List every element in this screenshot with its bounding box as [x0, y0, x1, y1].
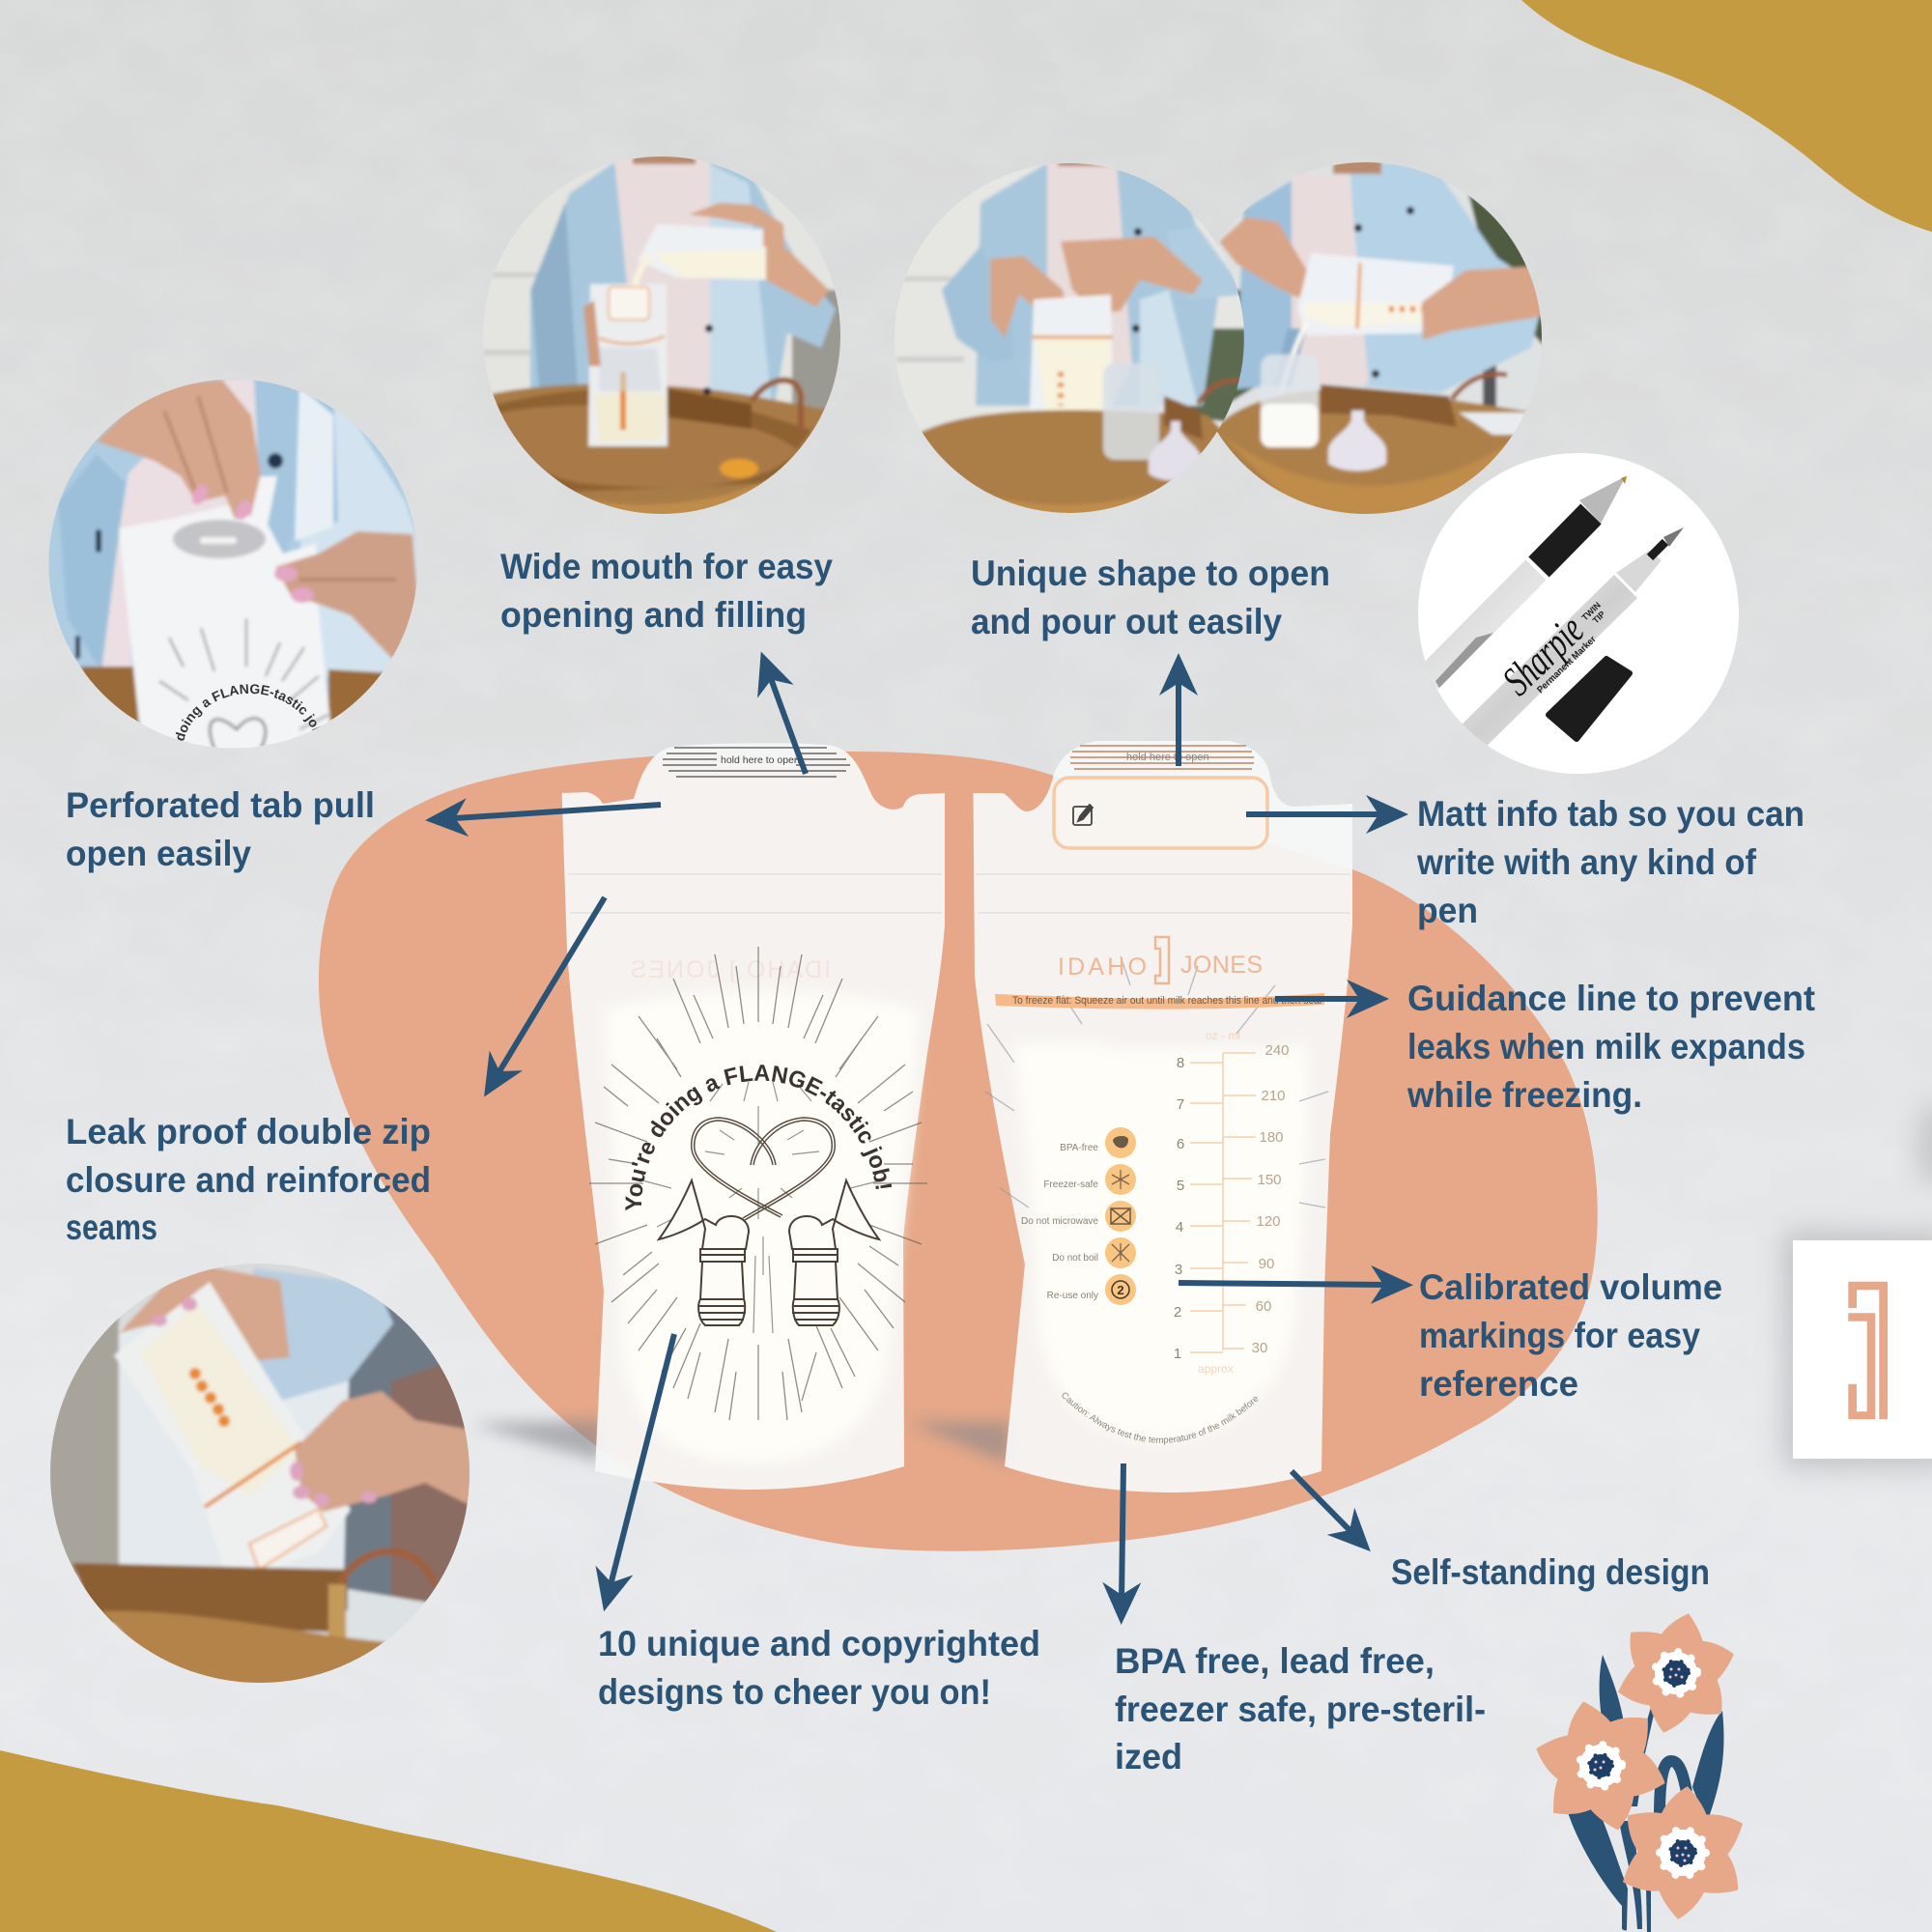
- panel: right bag (front, volume markings): [974, 741, 1352, 1492]
- millilitre numbers: 60: [1256, 1298, 1271, 1315]
- text: matt info tab: pen: [1417, 891, 1478, 930]
- safety icon labels: Freezer-safe: [1043, 1179, 1098, 1190]
- arrow: unique designs: [610, 1334, 674, 1589]
- arrow: matt info tab: [1246, 811, 1385, 817]
- ghost logo: IDAHO ] JONES: [629, 956, 831, 983]
- text: unique shape: [971, 554, 1330, 641]
- tab label: hold here to open: [1126, 752, 1209, 763]
- arrow: calibrated markings: [1179, 1283, 1390, 1285]
- text: calibrated: Calibrated volume: [1419, 1267, 1722, 1307]
- ounce numbers: 7: [1177, 1096, 1184, 1113]
- ounce numbers: [1174, 1055, 1184, 1362]
- text: perforated tab: Perforated tab pull: [66, 785, 375, 825]
- gold corner shape: top right: [1521, 0, 1932, 232]
- logo tab: white box with brand mark: [1783, 1231, 1932, 1468]
- photo: closing the filled bag: [895, 163, 1244, 513]
- text: unique designs: 10 unique and copyrighted: [598, 1624, 1040, 1663]
- text: perforated tab: [66, 785, 375, 873]
- photo: pouring milk from the bag into a jar: [1217, 162, 1542, 514]
- flower: top: [1610, 1608, 1742, 1738]
- millilitre numbers: 180: [1259, 1129, 1284, 1146]
- icon: left breast pump: [659, 1180, 749, 1325]
- leaves and stems: [1567, 1655, 1724, 1932]
- ounce numbers: 4: [1176, 1219, 1183, 1236]
- text: calibrated: reference: [1419, 1364, 1578, 1404]
- text: BPA free: ized: [1115, 1737, 1182, 1776]
- arrow: wide mouth: [769, 673, 806, 774]
- volume scale: [1174, 1029, 1290, 1376]
- text: unique shape: and pour out easily: [971, 602, 1282, 641]
- flower: bottom: [1611, 1784, 1754, 1921]
- text: perforated tab: open easily: [66, 834, 251, 873]
- marker label: Permanent Marker: [1535, 635, 1599, 696]
- brand logo: JONES: [1180, 952, 1263, 979]
- text: matt info tab: write with any kind of: [1416, 842, 1757, 882]
- ounce numbers: 3: [1175, 1262, 1182, 1278]
- text: leak proof: closure and reinforced: [66, 1160, 431, 1200]
- arrow: BPA free: [1122, 1463, 1123, 1602]
- text: leak proof: [66, 1112, 431, 1247]
- twin tip label: TWIN: [1579, 600, 1603, 622]
- photo: bag held upside down: [43, 1261, 478, 1686]
- text: wide mouth: [500, 547, 833, 635]
- brand logo: IDAHO: [1058, 953, 1147, 980]
- text: unique shape: Unique shape to open: [971, 554, 1330, 593]
- icon: sharpie marker: [1468, 527, 1684, 741]
- millilitre numbers: 120: [1256, 1213, 1281, 1230]
- photo: filling the bag from a bottle: [484, 156, 840, 514]
- icon: marker cap: [1548, 659, 1630, 739]
- ounce numbers: 1: [1174, 1346, 1181, 1362]
- text: unique designs: designs to cheer you on!: [598, 1672, 991, 1712]
- brand name: Sharpie: [1493, 606, 1593, 704]
- tear tab stripes: [1070, 746, 1254, 769]
- arrow: self-standing: [1292, 1471, 1354, 1535]
- text: wide mouth: Wide mouth for easy: [500, 547, 833, 586]
- text: calibrated: markings for easy: [1419, 1316, 1700, 1355]
- arrow: guidance line: [1275, 996, 1366, 1002]
- guidance text: To freeze flat: Squeeze air out until milk reaches this line and then seal: [1012, 995, 1321, 1007]
- millilitre numbers: 210: [1261, 1088, 1286, 1104]
- safety icons: [1021, 1127, 1136, 1305]
- text: BPA free: BPA free, lead free,: [1115, 1641, 1435, 1681]
- photo: perforated tab being torn: [48, 380, 417, 748]
- icon: pencil in box: [1073, 805, 1093, 825]
- text: calibrated: [1419, 1267, 1722, 1404]
- text: unique designs: [598, 1624, 1040, 1712]
- millilitre numbers: [1252, 1042, 1290, 1356]
- arrow: perforated tab: [448, 805, 661, 819]
- approx label: approx: [1198, 1362, 1234, 1376]
- text: self-standing: Self-standing design: [1391, 1552, 1710, 1592]
- tab label: hold here to open: [721, 754, 800, 766]
- text: matt info tab: [1416, 794, 1804, 930]
- millilitre numbers: 150: [1257, 1172, 1282, 1188]
- text: leak proof: Leak proof double zip: [66, 1112, 431, 1151]
- faint shadow at right edge: [1917, 1101, 1932, 1188]
- arrow: leak proof: [497, 897, 605, 1077]
- icon: ball pen: [1428, 476, 1627, 688]
- safety icon labels: Do not microwave: [1021, 1216, 1098, 1227]
- slogan on bag: You're doing a FLANGE-tastic job!: [625, 1065, 893, 1211]
- gold corner shape: bottom left: [0, 1750, 777, 1932]
- text: leak proof: seams: [66, 1208, 157, 1247]
- tear tab stripes: [663, 748, 850, 777]
- icon: right breast pump: [789, 1180, 879, 1325]
- ounce numbers: 5: [1177, 1178, 1184, 1194]
- brand logo: [1058, 937, 1263, 983]
- panel: left bag (back, FLANGE-tastic design): [562, 743, 945, 1490]
- ounce numbers: 8: [1177, 1055, 1184, 1071]
- ounce numbers: 2: [1174, 1304, 1181, 1321]
- text: BPA free: freezer safe, pre-steril-: [1115, 1690, 1486, 1729]
- text: wide mouth: opening and filling: [500, 595, 807, 635]
- millilitre numbers: 90: [1259, 1256, 1274, 1272]
- text: BPA free: [1115, 1641, 1486, 1776]
- safety icon labels: Do not boil: [1052, 1253, 1098, 1264]
- caution text: Caution: Always test the temperature of the milk before feeding.: [1063, 1393, 1258, 1445]
- icon: heart tubes: [692, 1118, 835, 1220]
- flower: left: [1529, 1694, 1672, 1837]
- sun rays: [589, 947, 927, 1420]
- photo: pens circle: [1418, 453, 1739, 774]
- safety icon labels: [1021, 1143, 1098, 1301]
- text: guidance line: leaks when milk expands: [1407, 1027, 1805, 1066]
- bag slogan in photo: doing a FLANGE-tastic job: [176, 684, 321, 741]
- millilitre numbers: 30: [1252, 1340, 1267, 1356]
- oz ml label: oz - ml: [1206, 1029, 1240, 1042]
- twin tip label: TIP: [1591, 610, 1607, 625]
- text: matt info tab: Matt info tab so you can: [1417, 794, 1804, 834]
- matt info tab: [1054, 778, 1267, 848]
- text: guidance line: Guidance line to prevent: [1407, 979, 1815, 1018]
- arrow: unique shape: [1176, 676, 1181, 766]
- safety icon labels: BPA-free: [1060, 1143, 1098, 1153]
- safety icon labels: Re-use only: [1047, 1291, 1098, 1301]
- guidance line band: [995, 993, 1324, 1009]
- millilitre numbers: 240: [1264, 1042, 1290, 1059]
- text: guidance line: [1406, 979, 1815, 1115]
- ounce numbers: 6: [1177, 1136, 1184, 1152]
- illustration: daffodils: [1529, 1608, 1754, 1932]
- salmon blob behind the bags: [319, 752, 1598, 1551]
- icon: brand mark: [1848, 1282, 1888, 1419]
- text: guidance line: while freezing.: [1406, 1075, 1642, 1115]
- bag shadows: [471, 1420, 1009, 1464]
- safety icons: 2: [1117, 1283, 1124, 1297]
